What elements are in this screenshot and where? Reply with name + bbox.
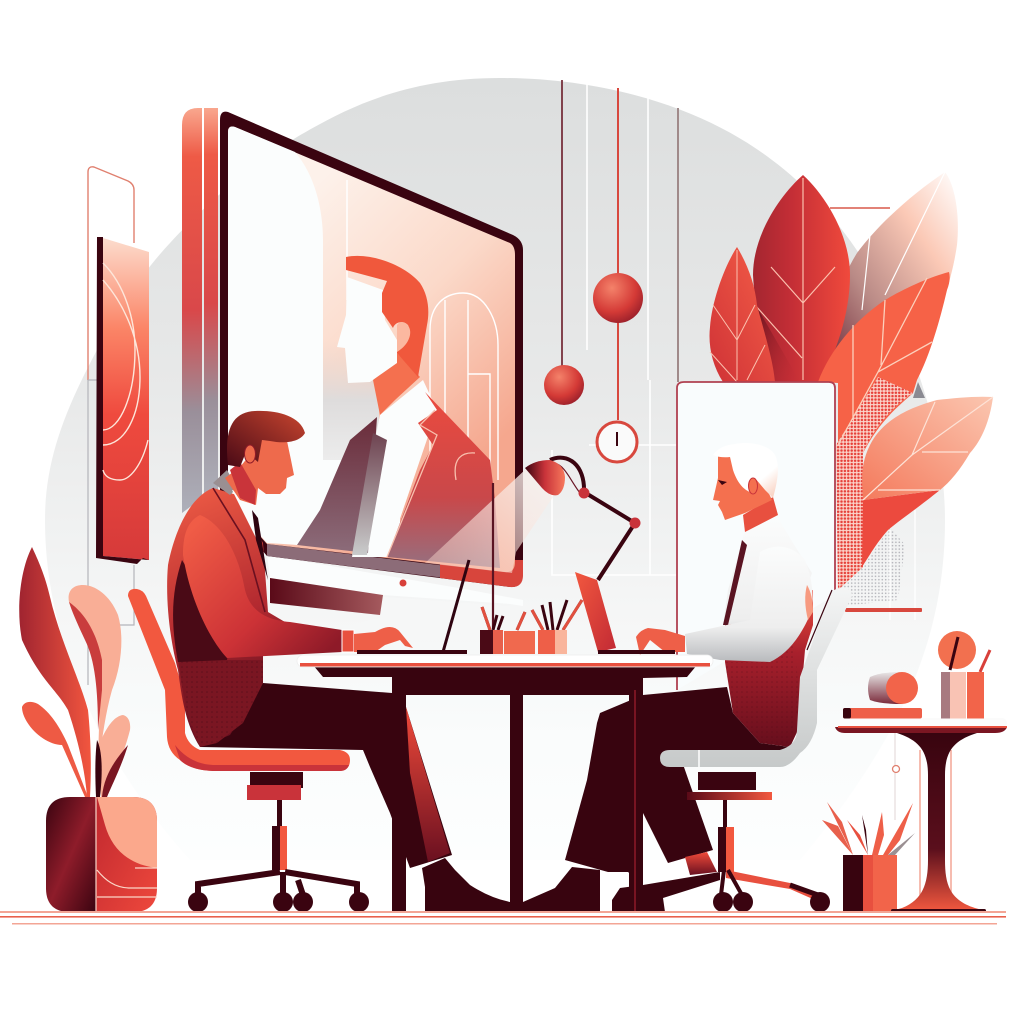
right chair <box>660 588 852 912</box>
side table with objects <box>835 631 1007 912</box>
table stem <box>891 733 986 911</box>
pens <box>950 637 958 670</box>
ear <box>397 322 410 352</box>
left man: collar <box>213 470 237 495</box>
right man: ear <box>748 478 758 494</box>
right chair shell <box>660 588 852 767</box>
right man: shirt <box>723 518 812 662</box>
left potted plant <box>19 547 157 912</box>
table top <box>835 727 1007 733</box>
red small bar <box>845 608 922 612</box>
lamp shade <box>525 460 565 495</box>
background arch <box>45 78 945 860</box>
lamp <box>425 458 640 628</box>
table apron <box>313 665 697 695</box>
tie <box>352 433 387 555</box>
small right planter <box>822 802 915 912</box>
left small leaf <box>710 247 775 382</box>
right man: jacket <box>725 590 813 747</box>
pot <box>46 797 96 912</box>
right man: hair <box>713 443 778 498</box>
left man: tie <box>252 510 268 580</box>
jacket left side <box>297 417 377 553</box>
lamp pole <box>492 483 494 628</box>
left man <box>167 411 510 912</box>
dark stem <box>95 740 102 797</box>
floor lines <box>0 911 1006 924</box>
left man: shirt <box>232 490 262 550</box>
white door panel <box>677 382 835 690</box>
left man: jacket <box>167 488 290 747</box>
right man: eye <box>718 480 727 485</box>
right man: hand <box>636 628 685 655</box>
right man: arm <box>685 547 813 662</box>
left man: dotted jacket hem <box>178 660 263 747</box>
wall panel <box>103 238 149 560</box>
pendant ball large <box>593 273 643 323</box>
lamp light beam <box>425 468 553 573</box>
screen person <box>297 256 500 568</box>
left man: red stripe on leg <box>406 707 450 862</box>
right man: rear shoe <box>612 872 720 912</box>
left man: ear <box>244 445 256 463</box>
left man: neck shadow <box>230 462 256 505</box>
wall lines <box>552 80 678 575</box>
pale tall leaf <box>69 585 121 770</box>
table legs <box>392 690 406 912</box>
shirt <box>352 380 437 557</box>
left chair <box>128 589 369 912</box>
left man: hand <box>354 627 413 652</box>
tall red leaf <box>19 547 91 797</box>
right man: legs <box>565 687 797 885</box>
monitor screen <box>228 127 515 572</box>
right man: salmon shoulder patch <box>805 585 813 620</box>
right man: neck <box>743 497 778 532</box>
monitor bezel <box>220 112 523 587</box>
right man: face <box>713 452 772 520</box>
stippled stalk <box>836 377 913 590</box>
hair <box>346 256 428 377</box>
left man: dark back patch <box>173 560 230 662</box>
left man: shoe <box>422 858 510 912</box>
wall clock <box>597 422 637 462</box>
jacket right <box>387 392 500 568</box>
monitor <box>182 108 523 640</box>
pale back leaf <box>823 172 958 370</box>
right man: tie <box>723 540 747 625</box>
pencil holders <box>480 600 582 654</box>
peach lower leaf <box>862 397 993 500</box>
monitor stand <box>267 555 523 606</box>
red lower leaf part <box>862 490 940 567</box>
top centre leaf <box>753 175 850 382</box>
left small leaf <box>22 702 88 797</box>
book <box>843 708 922 718</box>
left man: hair <box>227 411 305 467</box>
right man: sock <box>685 852 717 875</box>
left chair shell <box>128 589 350 771</box>
left man: cuff <box>342 630 354 652</box>
pendant ball small <box>544 365 584 405</box>
support lines <box>920 750 951 905</box>
wall frame left <box>88 167 149 685</box>
grey stipple <box>838 527 905 606</box>
laptop left <box>357 560 469 654</box>
cylinder <box>868 672 902 704</box>
orange leaf <box>818 272 950 590</box>
cups <box>941 672 966 718</box>
ball <box>938 631 976 669</box>
lamp arm <box>550 458 635 580</box>
right small leaf <box>100 715 130 797</box>
right man <box>523 443 813 912</box>
left man: sleeve <box>183 515 342 658</box>
monitor side strips <box>182 108 202 513</box>
face <box>337 277 397 383</box>
table top <box>297 655 713 667</box>
neck <box>373 353 420 415</box>
table <box>297 655 713 912</box>
left man: thighs and front leg <box>200 683 452 868</box>
left man: neck and face <box>225 440 294 505</box>
left man: lapel <box>213 488 265 612</box>
large plant right <box>710 172 993 620</box>
laptop right <box>575 572 675 654</box>
arch window <box>430 293 498 500</box>
right chair base <box>726 870 815 900</box>
right man: front shoe <box>523 867 600 912</box>
